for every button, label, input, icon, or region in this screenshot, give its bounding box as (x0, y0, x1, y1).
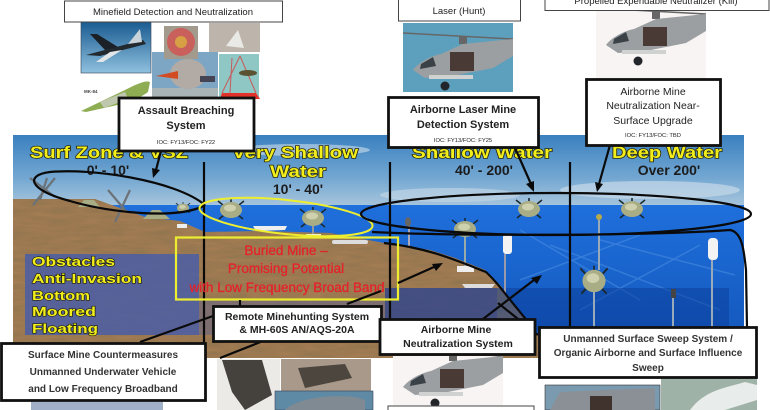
arrow: laser mine detection (515, 148, 534, 192)
callout: surface mine countermeasures: and Low Frequency Broadband (28, 384, 178, 395)
callout: airborne mine neutralization near-surface upgrade: IOC: FY13/FOC: TBD (625, 133, 681, 139)
VSW mines (218, 199, 368, 244)
callout: airborne mine neutralization near-surface upgrade: Airborne Mine (620, 86, 686, 98)
label: laser hunt (398, 0, 520, 21)
callout: shallow and deep water ellipse (361, 193, 751, 235)
arrow: buried mine to seabed (398, 263, 443, 283)
callout: surf zone ellipse (34, 171, 205, 214)
deep water moored mines (580, 214, 718, 327)
callout: airborne mine neutralization system: Airborne Mine (421, 324, 491, 336)
obstacles (30, 178, 130, 222)
arrow: AMNS to water (483, 275, 542, 319)
label: anti-invasion: Anti-Invasion (32, 271, 142, 286)
zone dividers (204, 162, 570, 343)
legend band (25, 254, 199, 335)
callout: airborne laser mine detection system: Detection System (417, 119, 509, 131)
callout: assault breaching system: IOC: FY13/FOC: FY22 (157, 140, 215, 146)
callout: airborne mine neutralization system (380, 320, 535, 354)
callout: yellow buried mine box (176, 238, 398, 300)
image: remote minehunting vehicle (217, 359, 371, 410)
callout: airborne laser mine detection system (388, 98, 538, 148)
panel: bottom images (31, 350, 757, 410)
image: bomb release (209, 23, 260, 52)
leader lines (140, 291, 538, 358)
callout: unmanned surface sweep system: Sweep (632, 363, 664, 374)
arrow: assault breaching (152, 151, 161, 178)
callout: unmanned surface sweep system: Organic Airborne and Surface Influence (554, 348, 743, 359)
image: AMNS helicopter (393, 356, 503, 406)
callout: very shallow water yellow ellipse (198, 191, 374, 243)
text: promising potential: Promising Potential (228, 261, 344, 276)
label: minefield detection and neutralization: Minefield Detection and Neutralization (93, 7, 253, 18)
callout: assault breaching system: Assault Breaching (138, 105, 234, 117)
title: water: Water (270, 162, 326, 181)
title: shallow water: Shallow Water (412, 143, 552, 162)
callout: AMNS system outline (372, 230, 747, 330)
callout: surface mine countermeasures: Unmanned Underwater Vehicle (30, 367, 177, 378)
image: helicopter, near-surface neutralizer (596, 11, 706, 78)
depth: 0-10: 0' - 10' (87, 162, 129, 178)
label: propelled expendable neutralizer (545, 0, 769, 10)
sky (13, 135, 744, 207)
image: bomb MK-84: MK-84 (84, 89, 98, 94)
label: bottom partial box (388, 406, 534, 410)
panel: minefield images (81, 22, 260, 112)
image: warhead cross-section (164, 26, 198, 59)
callout: unmanned surface sweep system (540, 328, 756, 378)
callout: remote minehunting system: Remote Minehunting System (225, 311, 369, 323)
callout: surface mine countermeasures: Surface Mine Countermeasures (28, 350, 178, 361)
callout: airborne mine neutralization near-surface upgrade: Surface Upgrade (613, 115, 693, 127)
callout: surface mine countermeasures (2, 344, 206, 400)
label: floating: Floating (32, 321, 98, 336)
label: bottom: Bottom (32, 288, 90, 303)
title: surf zone: Surf Zone & VSZ (30, 143, 188, 162)
label: obstacles: Obstacles (32, 254, 115, 269)
image: bomb MK-84 (81, 82, 150, 112)
moored mine surf (176, 202, 190, 228)
callout: assault breaching system: System (166, 120, 206, 132)
title: very shallow water: Very Shallow (232, 143, 359, 162)
callout: unmanned surface sweep system: Unmanned Surface Sweep System / (563, 334, 733, 345)
image: left sky strip (31, 402, 163, 410)
arrow: near-surface upgrade (595, 145, 610, 192)
callout: airborne laser mine detection system: IOC: FY13/FOC: FY25 (434, 138, 492, 144)
seabed (13, 199, 540, 358)
label: minefield detection and neutralization (64, 1, 282, 22)
callout: airborne mine neutralization system: Neutralization System (403, 338, 513, 350)
obstacles and mines (30, 178, 718, 327)
image: dart array diagram (219, 54, 260, 99)
depth: 40-200: 40' - 200' (455, 162, 513, 178)
callout: airborne mine neutralization near-surface upgrade: Neutralization Near- (606, 100, 700, 112)
callout: remote minehunting system (214, 306, 382, 342)
label: laser hunt: Laser (Hunt) (433, 6, 485, 17)
depth: 10-40: 10' - 40' (273, 181, 323, 197)
image: explosion test (152, 52, 218, 98)
image: helicopter, laser hunt (403, 23, 513, 92)
image: unmanned surface craft (661, 378, 757, 410)
text: low frequency broad band: with Low Frequency Broad Band (188, 280, 385, 295)
deep band (497, 288, 729, 331)
image: MH-60S helicopter (275, 391, 373, 410)
bottom mine surf (143, 210, 170, 219)
depth: over 200: Over 200' (638, 162, 700, 178)
label: moored: Moored (32, 304, 96, 319)
image: surface sweep helicopter (545, 385, 660, 410)
text: buried mine: Buried Mine – (244, 243, 328, 258)
water (13, 205, 744, 358)
shallow water moored mines (405, 198, 645, 294)
image: B-52 bomber (81, 22, 151, 73)
callout: airborne mine neutralization near-surface upgrade (586, 80, 720, 146)
title: deep water: Deep Water (612, 143, 722, 162)
zone titles (30, 143, 722, 197)
panel: battlespace cross section (13, 135, 744, 358)
callout: airborne laser mine detection system: Airborne Laser Mine (410, 104, 516, 116)
callout: remote minehunting system: & MH-60S AN/AQS-20A (239, 324, 355, 336)
callout: assault breaching system (119, 98, 254, 151)
legend labels (32, 254, 142, 336)
